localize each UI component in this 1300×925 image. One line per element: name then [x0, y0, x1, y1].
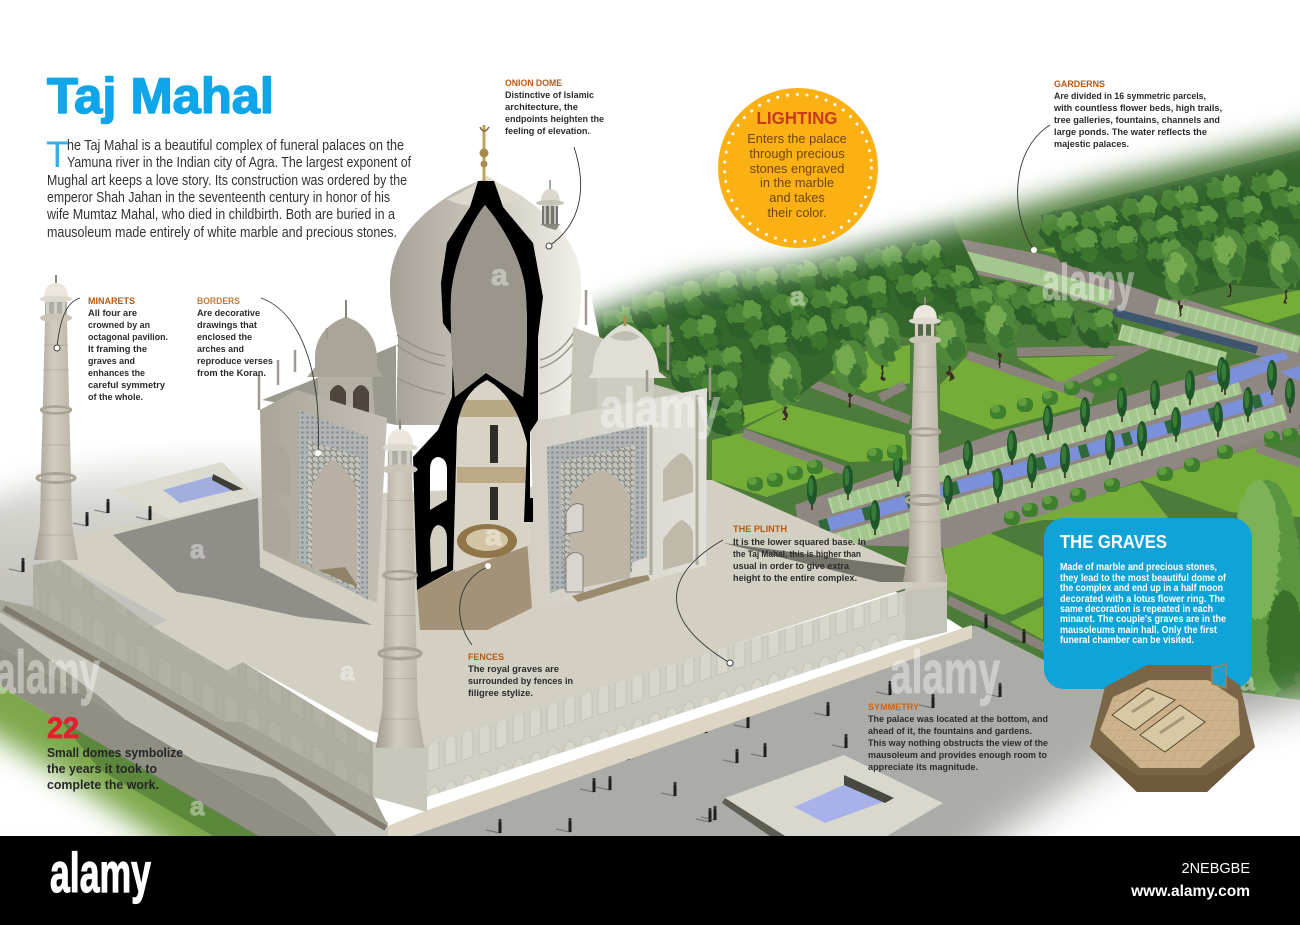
title: Taj Mahal [47, 68, 274, 124]
callout: onion dome: endpoints heighten the [505, 114, 604, 125]
callout: borders: BORDERS [197, 296, 240, 307]
intro text: emperor Shah Jahan in the seventeenth century in honor of his [47, 190, 390, 206]
callout: gardens: majestic palaces. [1054, 139, 1129, 150]
lattice on the flower beds [830, 306, 1300, 543]
lower walkway [0, 600, 388, 842]
image id: 2NEBGBE [1182, 861, 1250, 877]
footer logo: alamy [50, 841, 151, 904]
statistic: 22 small domes: the years it took to [47, 761, 157, 776]
minaret: back left [34, 275, 78, 560]
ponds [1205, 352, 1300, 386]
callout: minarets: All four are [88, 308, 137, 319]
big tree on the right [1234, 480, 1300, 700]
callout: symmetry: This way nothing obstructs the view of the [868, 738, 1048, 749]
mausoleum [259, 125, 710, 630]
small dome left [307, 300, 383, 418]
callout: lighting [718, 88, 878, 248]
section interior wall [455, 378, 530, 572]
interior bands and niches [457, 400, 527, 520]
black cross-section [413, 181, 543, 590]
callout: symmetry [868, 702, 1048, 773]
shadow on the lower walkway [0, 615, 340, 840]
panel: the graves [1044, 518, 1252, 689]
separated pavilion piece [536, 180, 564, 230]
plaza [350, 614, 1300, 900]
leader line: onion dome [546, 147, 581, 249]
website: www.alamy.com [1130, 883, 1250, 900]
small dome right [588, 316, 667, 418]
watermarks: a [1095, 534, 1109, 561]
lighting text: stones engraved [750, 161, 844, 176]
statistic: 22 small domes: Small domes symbolize [47, 745, 183, 760]
callout: fences [468, 652, 573, 699]
watermarks: a [340, 656, 355, 686]
plinth top terrace [60, 480, 913, 745]
callout: gardens [1053, 79, 1222, 150]
plinth corner right [905, 583, 947, 640]
main dome [390, 178, 581, 425]
watermarks: a [190, 534, 205, 564]
plinth front strip [388, 625, 972, 842]
upper ledge [0, 600, 388, 825]
callout: onion dome: feeling of elevation. [505, 126, 590, 137]
garden paths [743, 330, 1300, 650]
callout: gardens: GARDERNS [1054, 79, 1105, 90]
callout: the plinth: THE PLINTH [733, 524, 787, 535]
walkway shade [0, 640, 330, 840]
callout: minarets [88, 296, 168, 403]
callout: minarets: careful symmetry [88, 380, 166, 391]
callout: borders: drawings that [197, 320, 258, 331]
panel body: Made of marble and precious stones, [1060, 562, 1217, 573]
interior dome surface [451, 205, 527, 397]
shadow beside the building [113, 498, 372, 625]
back-left fountain [113, 462, 258, 519]
plinth corner cap [905, 565, 947, 592]
watermarks: alamy [600, 376, 720, 439]
footer bar [0, 836, 1300, 925]
statistic: 22 small domes: 22 [47, 712, 79, 745]
watermarks [0, 254, 1255, 821]
leader line: gardens [1018, 125, 1050, 253]
garden lawns [697, 235, 1300, 640]
watermarks: alamy [1042, 254, 1134, 312]
panel body: they lead to the most beautiful dome of [1060, 573, 1227, 584]
plinth left wall [33, 560, 373, 797]
callout: borders: enclosed the [197, 332, 252, 343]
scene: gardens [480, 0, 1300, 730]
callout: gardens: with countless flower beds, high trails, [1053, 103, 1222, 114]
callout: borders: reproduce verses [197, 356, 273, 367]
callout: fences: surrounded by fences in [468, 676, 573, 687]
fade of the upper garden edge [480, 0, 1300, 350]
forest canopy base [590, 150, 1300, 410]
plinth right wall [427, 588, 913, 797]
callout: minarets: It framing the [88, 344, 147, 355]
intro text: Mughal art keeps a love story. Its construction was ordered by the [47, 173, 407, 189]
callout: onion dome: architecture, the [505, 102, 578, 113]
bottom right fade [930, 690, 1300, 900]
panel body: mausoleums main hall. Only the first [1060, 625, 1218, 636]
callout: minarets: octagonal pavilion. [88, 332, 168, 343]
intro text: he Taj Mahal is a beautiful complex of funeral palaces on the [67, 138, 404, 154]
plinth corner front [373, 742, 427, 812]
section floor [417, 540, 532, 630]
panel body: minaret. The couple's graves are in the [1060, 614, 1226, 625]
panel heading: THE GRAVES [1060, 532, 1167, 552]
left ground [0, 430, 300, 640]
finial and lotus [447, 125, 524, 206]
callout: symmetry: appreciate its magnitude. [868, 762, 978, 773]
callout: minarets: graves and [88, 356, 135, 367]
left ground fade [0, 380, 330, 510]
lighting text: and takes [769, 190, 825, 205]
callout: the plinth: height to the entire complex. [733, 573, 857, 584]
grave chamber illustration [1090, 664, 1255, 792]
callout: fences: filigree stylize. [468, 688, 533, 699]
leader line: plinth [677, 540, 733, 666]
forest of trees [600, 170, 1300, 435]
callout: borders: from the Koran. [197, 368, 266, 379]
callout: fences: FENCES [468, 652, 504, 663]
callout: minarets: MINARETS [88, 296, 135, 307]
shadow on the right terrace [723, 543, 905, 582]
panel body: the complex and end up in a half moon [1060, 583, 1223, 594]
intro text: mausoleum made entirely of white marble and precious stones. [47, 225, 397, 241]
callout: onion dome [505, 78, 604, 137]
central walkway [795, 345, 1300, 548]
callout: borders [197, 296, 273, 379]
callout: minarets: enhances the [88, 368, 145, 379]
upper walkway [930, 250, 1300, 352]
people behind the plinth [9, 499, 152, 572]
callout: onion dome: Distinctive of Islamic [505, 90, 594, 101]
lighting text: through precious [749, 146, 845, 161]
callout: symmetry: ahead of it, the fountains and gardens. [868, 726, 1032, 737]
lower-left ground strips [0, 600, 972, 860]
shadow on the grass [60, 720, 262, 840]
leader line: fences [460, 563, 491, 645]
statistic: 22 small domes: complete the work. [47, 777, 159, 792]
minaret: back right [903, 297, 947, 582]
lighting text: Enters the palace [747, 131, 847, 146]
drop cap: T [46, 134, 69, 175]
flower-bed bands [830, 253, 1300, 543]
watermarks: a [1240, 666, 1255, 696]
callout: fences: The royal graves are [468, 664, 559, 675]
spires [259, 290, 710, 410]
minaret: front [376, 420, 424, 748]
cypress rows [807, 357, 1295, 535]
dome drum bands [397, 332, 574, 394]
garden ground [585, 90, 1300, 730]
lighting text [747, 131, 847, 220]
callout: gardens: Are divided in 16 symmetric parcels, [1054, 91, 1206, 102]
watermarks: alamy [890, 639, 1000, 706]
watermarks: a [491, 259, 508, 292]
callout: minarets: of the whole. [88, 392, 143, 403]
callout: the plinth [733, 524, 866, 584]
back terraces [262, 345, 396, 425]
callout: minarets: crowned by an [88, 320, 150, 331]
white fade over the grass [0, 715, 190, 860]
plinth [9, 462, 947, 812]
watermarks: alamy [0, 639, 100, 706]
panel body: decorated with a lotus flower ring. The [1060, 594, 1226, 605]
panel body: same decoration is repeated in each [1060, 604, 1213, 615]
callout: symmetry: SYMMETRY [868, 702, 920, 713]
callout: gardens: tree galleries, fountains, channels and [1054, 115, 1220, 126]
hedges [747, 373, 1298, 525]
people on the plaza [486, 614, 1026, 833]
intro text: Yamuna river in the Indian city of Agra. The largest exponent of [67, 155, 412, 171]
callout: the plinth: usual in order to give extra [733, 561, 850, 572]
statistic: 22 small domes [47, 712, 183, 792]
right facade [530, 388, 707, 612]
lighting text: their color. [767, 205, 827, 220]
graves screen [457, 524, 517, 558]
intro text [46, 134, 412, 241]
ledge moulding [4, 608, 386, 828]
watermarks: a [190, 791, 205, 821]
panel body: funeral chamber can be visited. [1060, 635, 1194, 646]
watermarks: a [485, 519, 502, 552]
panel body [1060, 562, 1227, 646]
callout: the plinth: the Taj Mahal, this is higher than [733, 549, 861, 560]
water channels [820, 265, 1273, 527]
leader line: borders [261, 298, 321, 456]
lighting text: in the marble [760, 175, 834, 190]
callout: the plinth: It is the lower squared base. In [733, 537, 866, 548]
intro text: wife Mumtaz Mahal, who died in childbirth. Both are buried in a [46, 207, 395, 223]
leader line: minarets [54, 298, 80, 351]
callout: gardens: large ponds. The water reflects the [1054, 127, 1207, 138]
front fountain [722, 755, 943, 840]
callout: borders: Are decorative [197, 308, 260, 319]
grass strip [0, 680, 262, 840]
callout: borders: arches and [197, 344, 244, 355]
callout: onion dome: ONION DOME [505, 78, 562, 89]
left facade [260, 390, 387, 603]
callout: symmetry: The palace was located at the bottom, and [868, 714, 1048, 725]
lighting heading: LIGHTING [756, 108, 838, 128]
watermarks: a [790, 281, 805, 311]
callout: symmetry: mausoleum and provides enough room to [868, 750, 1047, 761]
